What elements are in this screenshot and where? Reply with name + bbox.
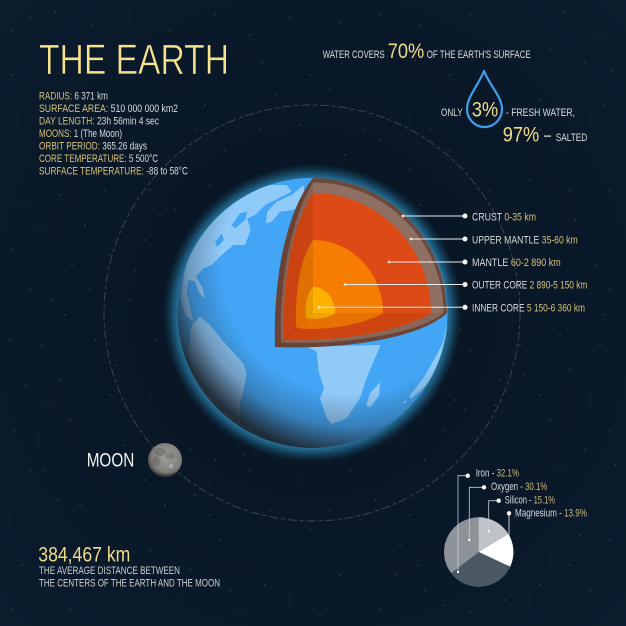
earth facts list: [39, 90, 188, 178]
earth facts list: CORE TEMPERATURE: 5 500°C: [39, 153, 158, 165]
water coverage statement: 70%: [388, 40, 424, 63]
pie labels: Iron - 32.1%: [476, 468, 519, 480]
fresh and salted water text: SALTED: [556, 132, 587, 144]
fresh and salted water text: 97%: [503, 123, 539, 146]
pie labels: [476, 468, 587, 520]
continents: [181, 185, 453, 432]
fresh and salted water text: 3%: [472, 98, 498, 122]
pie labels: Oxygen - 30.1%: [491, 481, 548, 493]
inner core layer: [306, 287, 335, 319]
earth facts list: SURFACE AREA: 510 000 000 km2: [39, 103, 178, 115]
layer labels: UPPER MANTLE 35-60 km: [472, 234, 578, 246]
moon distance: THE AVERAGE DISTANCE BETWEEN: [39, 565, 180, 577]
earth cutaway layers: [274, 178, 447, 348]
earth facts list: MOONS: 1 (The Moon): [39, 128, 122, 140]
earth facts list: DAY LENGTH: 23h 56min 4 sec: [39, 116, 159, 128]
layer labels: MANTLE 60-2 890 km: [472, 257, 561, 269]
title: THE EARTH: [39, 36, 229, 84]
layer labels: [472, 212, 587, 314]
icon: moon: [148, 443, 182, 477]
layer labels: CRUST 0-35 km: [472, 212, 536, 224]
pie leader lines: [457, 474, 511, 573]
moon orbit: [104, 105, 520, 521]
moon distance: [38, 544, 220, 590]
night shadow: [178, 178, 448, 448]
fresh and salted water text: ONLY: [441, 107, 463, 119]
fresh and salted water text: - FRESH WATER,: [506, 107, 575, 119]
earth facts list: SURFACE TEMPERATURE: -88 to 58°C: [39, 166, 188, 178]
layer leader lines: [318, 214, 468, 310]
pie labels: Silicon - 15.1%: [505, 494, 555, 506]
moon distance: THE CENTERS OF THE EARTH AND THE MOON: [39, 578, 220, 590]
layer labels: OUTER CORE 2 890-5 150 km: [472, 280, 587, 292]
crust layer: [275, 178, 447, 347]
shaded left and bottom faces: [274, 178, 444, 348]
water coverage statement: WATER COVERS: [323, 49, 385, 61]
water coverage statement: OF THE EARTH'S SURFACE: [427, 49, 531, 61]
earth atmosphere glow: [162, 163, 462, 463]
upper mantle layer: [281, 182, 444, 343]
earth facts list: RADIUS: 6 371 km: [39, 90, 108, 102]
pie labels: Magnesium - 13.9%: [515, 508, 587, 520]
water coverage statement: [323, 40, 531, 63]
layer labels: INNER CORE 5 150-6 360 km: [472, 302, 585, 314]
icon: water drop: [467, 71, 502, 127]
earth facts list: ORBIT PERIOD: 365.26 days: [39, 140, 147, 152]
fresh and salted water text: [441, 98, 587, 146]
pie chart: earth composition: [444, 517, 514, 587]
earth globe: [178, 178, 453, 448]
moon label: MOON: [87, 450, 134, 472]
outer core layer: [296, 240, 383, 329]
mantle layer: [284, 193, 431, 340]
moon distance: 384,467 km: [38, 544, 130, 567]
